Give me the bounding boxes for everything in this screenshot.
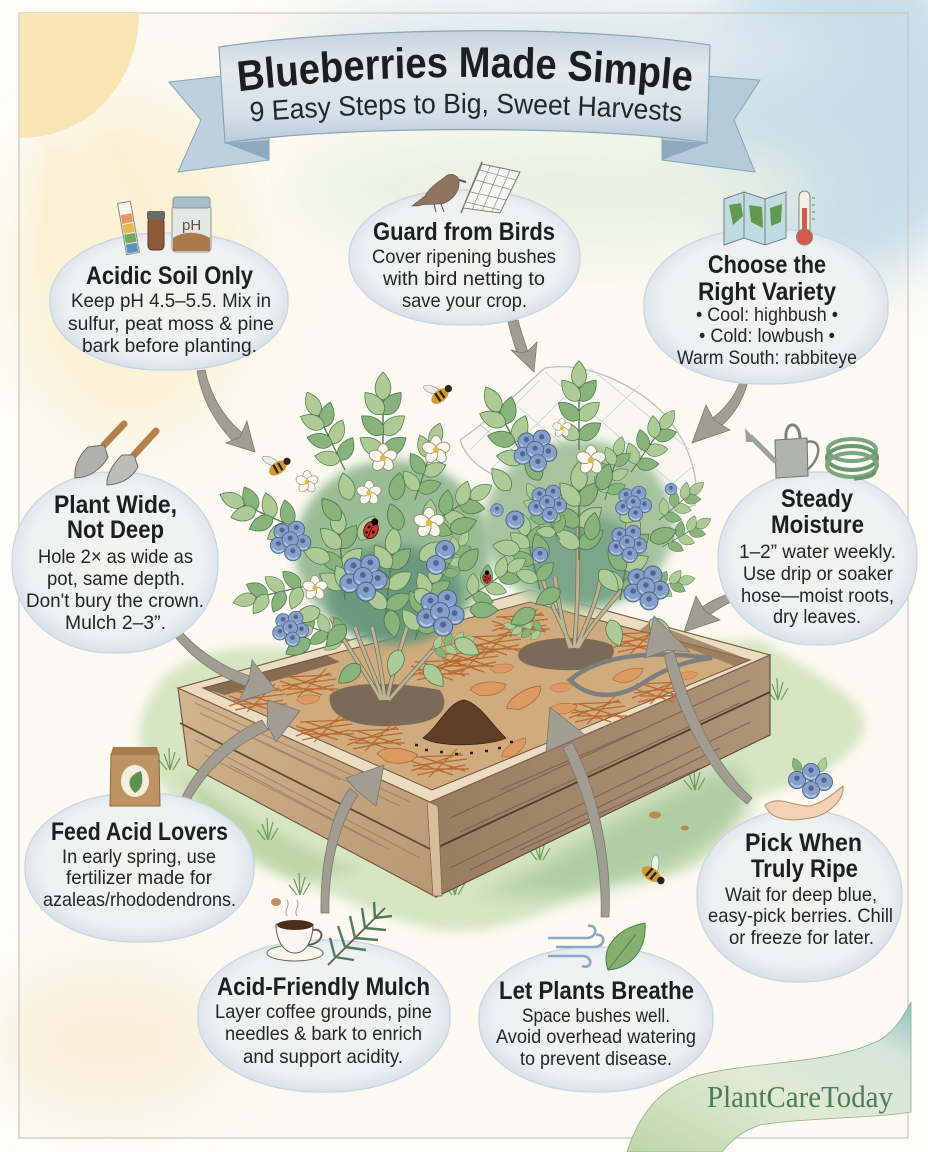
heading: Let Plants Breathe	[499, 977, 694, 1005]
icon: watering can and hose	[745, 425, 877, 479]
blueberry bush: left	[210, 372, 538, 700]
heading: Pick When	[745, 829, 862, 857]
compost pile	[415, 700, 513, 754]
body text: dry leaves.	[773, 606, 861, 628]
body text: Don't bury the crown.	[26, 590, 204, 612]
icon: bird and net	[412, 162, 520, 213]
heading	[54, 491, 177, 544]
heading	[698, 251, 836, 306]
icon: map and thermometer	[724, 191, 815, 245]
body text: fertilizer made for	[66, 867, 212, 889]
body text	[708, 884, 893, 949]
panel: choose variety	[644, 191, 888, 384]
panel: guard from birds	[349, 162, 580, 325]
body text: with bird netting to	[382, 268, 545, 290]
soaker hose	[570, 654, 712, 695]
panel: pick when ripe	[697, 756, 902, 982]
body text: easy-pick berries. Chill	[708, 905, 893, 927]
arrow from feed bubble	[179, 700, 300, 806]
body text: to prevent disease.	[520, 1048, 672, 1070]
heading: Moisture	[771, 511, 864, 539]
body text	[496, 1005, 696, 1070]
heading: Acidic Soil Only	[86, 262, 253, 290]
body text: azaleas/rhododendrons.	[43, 889, 236, 911]
arrow from plant wide bubble	[175, 632, 276, 702]
body text: and support acidity.	[243, 1046, 403, 1068]
grass around raised bed	[139, 640, 864, 930]
body text: hose—moist roots,	[741, 585, 894, 607]
body text: Cover ripening bushes	[372, 246, 556, 268]
body text	[68, 290, 274, 357]
heading	[745, 829, 862, 883]
body text: 1–2” water weekly.	[739, 541, 896, 563]
subtitle: 9 Easy Steps to Big, Sweet Harvests	[250, 92, 682, 123]
body text: Wait for deep blue,	[725, 884, 877, 906]
panel: plant wide	[12, 424, 218, 653]
heading: Choose the	[708, 251, 826, 279]
icon: pH strips and jar: pH	[182, 217, 201, 234]
body text	[215, 1001, 432, 1068]
heading	[771, 485, 864, 539]
heading: Right Variety	[698, 278, 836, 306]
body text: Mulch 2–3”.	[65, 612, 166, 634]
footer ribbon	[627, 1002, 911, 1152]
bed rim	[178, 590, 770, 802]
icon: trowels	[75, 424, 156, 485]
body text: needles & bark to enrich	[225, 1023, 422, 1045]
icon: wind and leaf	[548, 923, 645, 970]
heading: Feed Acid Lovers	[51, 818, 228, 846]
body text: pot, same depth.	[47, 568, 185, 590]
body text: • Cold: lowbush •	[699, 325, 835, 347]
body text: Warm South: rabbiteye	[677, 347, 857, 369]
body text: Avoid overhead watering	[496, 1026, 696, 1048]
bee top	[421, 377, 456, 409]
heading: Guard from Birds	[373, 218, 555, 246]
panel: let plants breathe	[479, 923, 713, 1092]
title: Blueberries Made Simple	[238, 47, 692, 95]
body text	[677, 304, 857, 369]
body text: In early spring, use	[62, 846, 216, 868]
body text: bark before planting.	[82, 335, 257, 357]
heading: Not Deep	[67, 516, 164, 544]
body text: sulfur, peat moss & pine	[68, 313, 274, 335]
blueberry bush: right	[462, 361, 719, 649]
banner tails	[169, 76, 760, 172]
bee lower right	[634, 852, 673, 891]
title banner	[168, 30, 761, 173]
panel: arrows	[175, 320, 752, 917]
icon: hand with blueberries	[765, 756, 843, 820]
arrow from moisture bubble	[684, 592, 736, 632]
mulch surface	[203, 602, 750, 790]
body text: • Cool: highbush •	[696, 304, 838, 326]
panel: feed acid lovers	[25, 747, 254, 942]
arrow from breathe bubble	[546, 707, 609, 917]
right wood side	[427, 655, 770, 897]
heading: Truly Ripe	[751, 855, 858, 883]
heading: Plant Wide,	[54, 491, 177, 519]
arrow from pick bubble	[645, 616, 752, 804]
body text: or freeze for later.	[729, 927, 874, 949]
body text	[43, 846, 236, 911]
net dome	[460, 367, 696, 516]
logo text: PlantCareToday	[707, 1079, 893, 1114]
body text	[26, 546, 204, 634]
panel: steady moisture	[718, 425, 917, 645]
body text	[372, 246, 556, 312]
body text: save your crop.	[402, 290, 527, 312]
panel: acid-friendly mulch	[198, 900, 450, 1092]
sun	[20, 13, 170, 270]
arrow from mulch bubble	[321, 765, 384, 913]
arrow to left bush	[197, 370, 255, 452]
body text: Use drip or soaker	[743, 563, 893, 585]
body text: Hole 2× as wide as	[38, 546, 193, 568]
body text: Space bushes well.	[522, 1005, 670, 1027]
heading: Acid-Friendly Mulch	[217, 973, 430, 1001]
arrow from variety bubble	[692, 379, 748, 443]
body text	[739, 541, 896, 628]
icon: coffee cup and pine sprig	[267, 900, 392, 965]
panel: acidic soil	[50, 197, 288, 370]
icon: pH strips and jar	[118, 197, 211, 255]
body text: Keep pH 4.5–5.5. Mix in	[71, 290, 271, 312]
icon: fertilizer bag	[110, 747, 160, 806]
arrow from guard bubble	[508, 320, 537, 372]
body text: Layer coffee grounds, pine	[215, 1001, 432, 1023]
left wood side	[178, 688, 436, 897]
heading: Steady	[781, 485, 853, 513]
raised garden bed	[178, 590, 770, 897]
